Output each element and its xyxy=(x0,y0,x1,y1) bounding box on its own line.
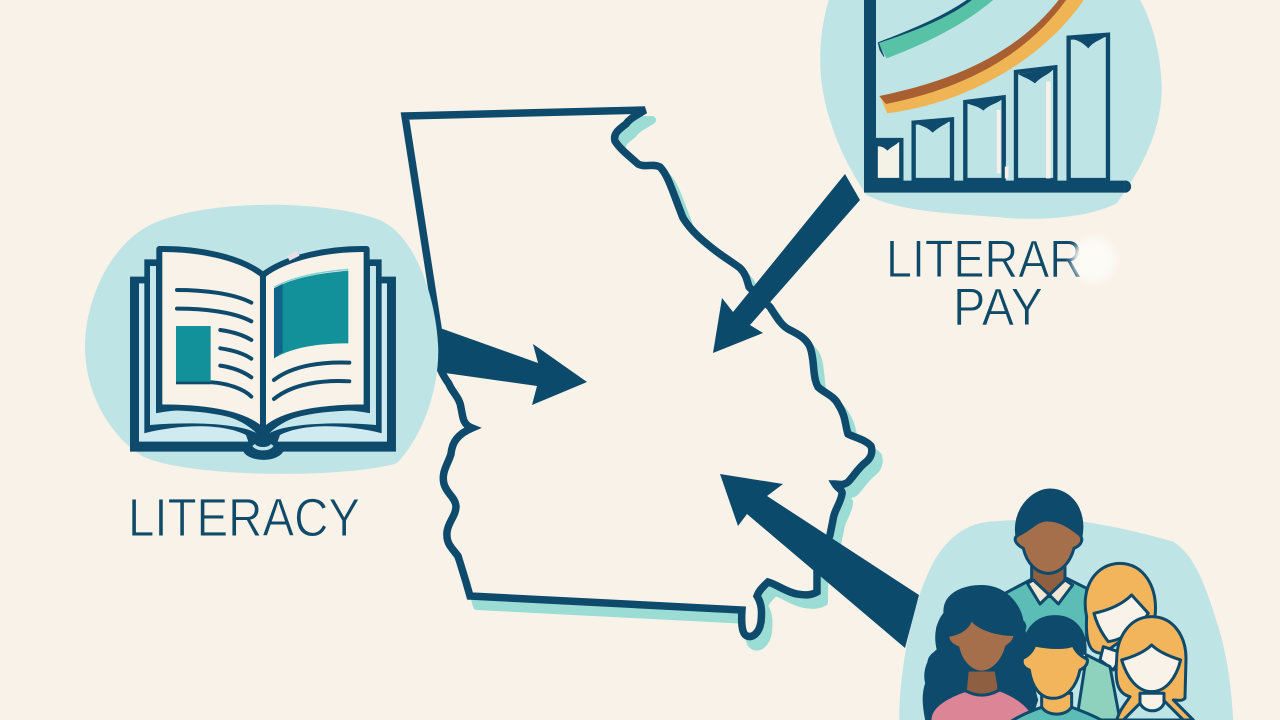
curve: green xyxy=(878,0,995,58)
person: blonde woman front xyxy=(1116,617,1193,720)
icon: group of people xyxy=(899,490,1233,720)
panel: literary pay: PAY xyxy=(953,278,1043,337)
icon: open book xyxy=(85,205,438,474)
person: blonde woman back xyxy=(1077,563,1155,720)
panel: people xyxy=(899,490,1233,720)
arrow: literary pay to map xyxy=(713,174,860,353)
map: state outline xyxy=(405,110,879,646)
panel: literary pay xyxy=(820,0,1162,337)
smudge over label xyxy=(1072,238,1116,282)
person: front boy xyxy=(1008,617,1107,720)
bars xyxy=(876,35,1108,180)
person: back man xyxy=(1005,490,1087,640)
person: curly hair woman xyxy=(924,586,1037,720)
panel: literacy xyxy=(85,205,438,548)
label: literacy: LITERACY xyxy=(128,488,360,548)
curve: orange xyxy=(880,0,1085,113)
arrow: literacy to map xyxy=(438,328,587,405)
label: literary pay: LITERAR xyxy=(886,230,1083,289)
icon: bar chart with curves xyxy=(820,0,1162,219)
arrow: people to map xyxy=(720,474,919,648)
